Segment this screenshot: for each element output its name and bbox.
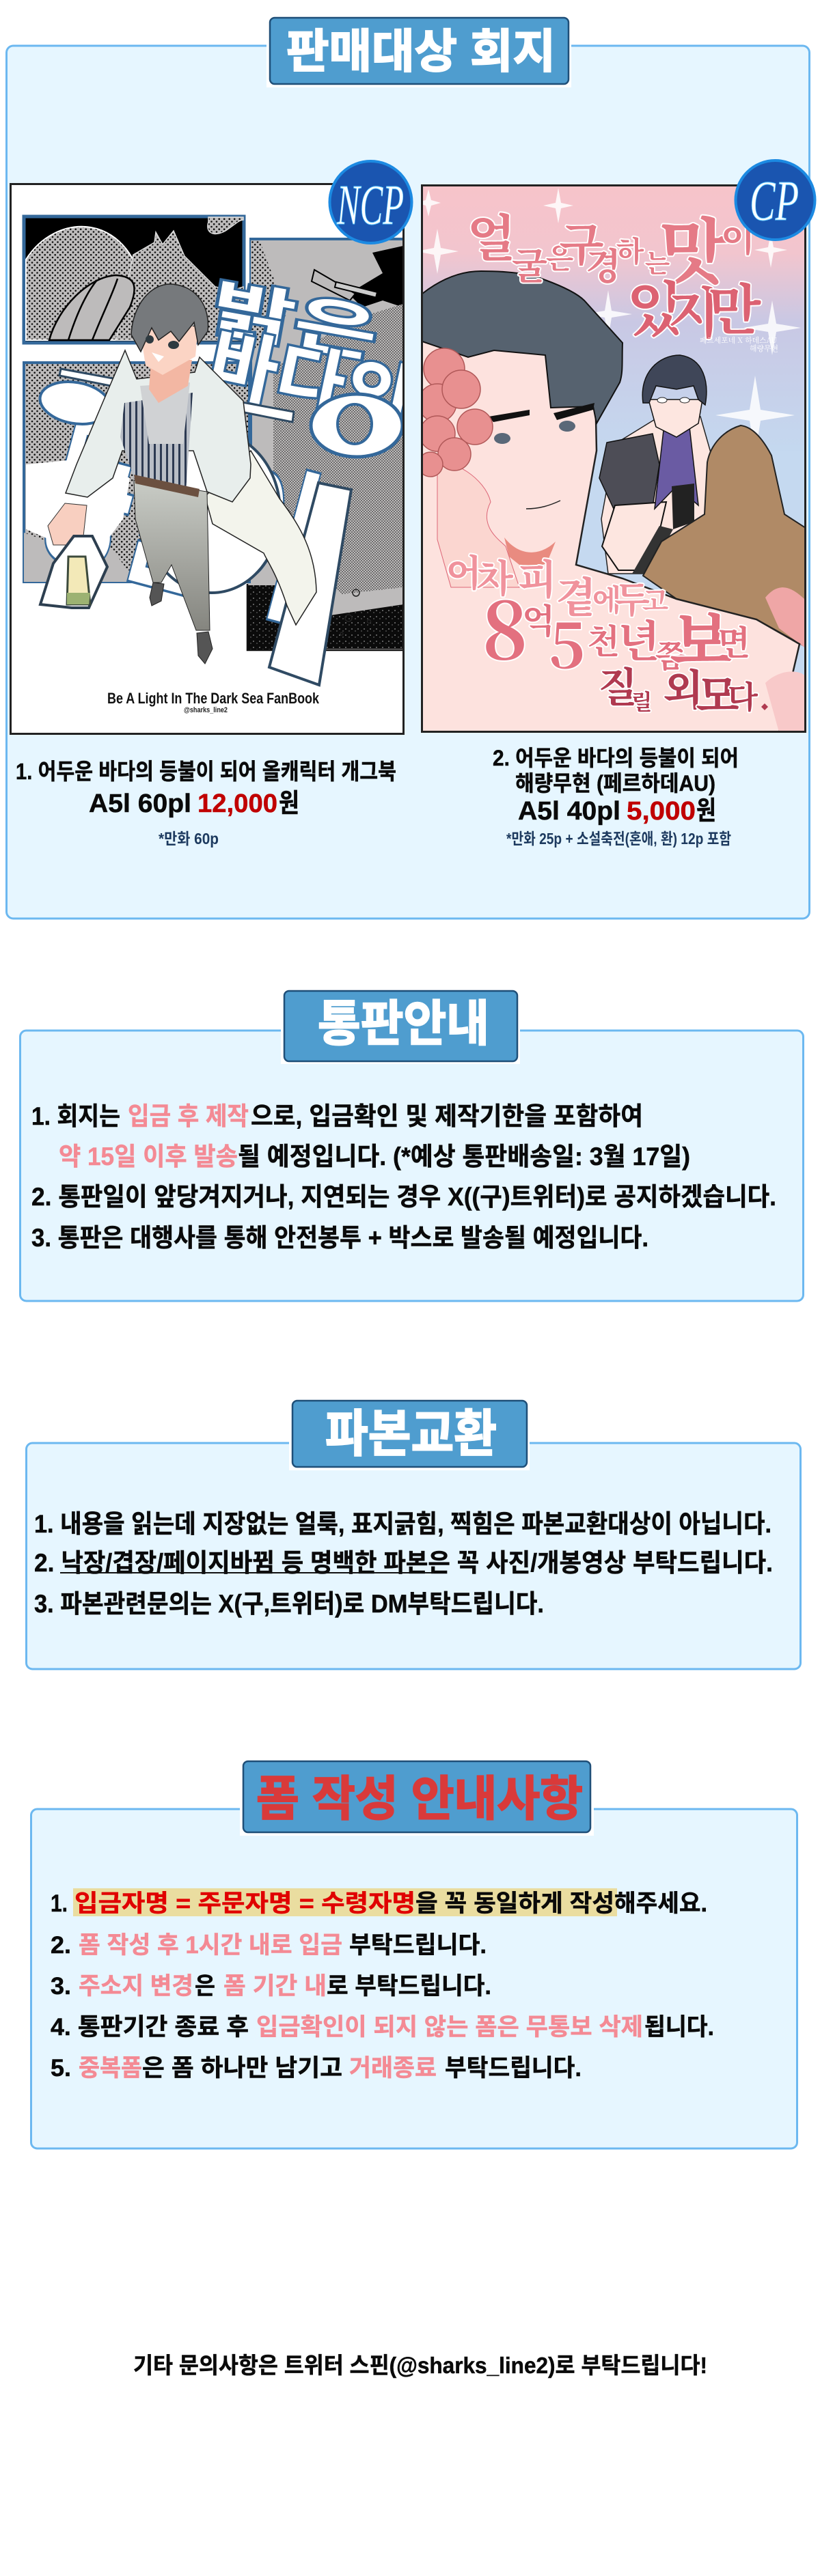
list: form notes: 입금확인이 되지 않는 폼은 무통보 삭제: [256, 2014, 643, 2041]
coat tail: [205, 451, 316, 625]
list: form notes: 폼 작성 후 1시간 내로 입금: [79, 1932, 342, 1959]
character illustration: [40, 284, 316, 664]
face: [139, 326, 198, 375]
list: form notes: 1.: [51, 1890, 68, 1917]
cover title upper: 만: [708, 266, 761, 345]
white zigzag lower left: [26, 460, 130, 541]
list: form notes: 됩니다.: [644, 2014, 714, 2041]
white ring left: [38, 380, 106, 425]
list: form notes: 입금자명 = 주문자명 = 수령자명: [74, 1890, 415, 1917]
book 1 price: 원: [279, 789, 299, 818]
list: form notes: 2.: [51, 1932, 71, 1959]
cover title upper: 맛: [659, 195, 730, 299]
cover title lower: 어: [446, 544, 482, 597]
cover title upper: 얼: [467, 199, 516, 271]
neck: [149, 360, 192, 403]
eyes: [146, 335, 179, 349]
cover title lower: 에: [592, 576, 621, 619]
cover title upper: 구: [559, 208, 604, 275]
book 2 price: 5,000: [627, 797, 696, 826]
ring hole: [338, 404, 372, 444]
cover title upper: 굴: [512, 238, 547, 290]
shoes: [150, 583, 213, 664]
big white ring centre: [167, 443, 281, 594]
main character skin: [422, 341, 800, 732]
comic panel: top right: [251, 239, 405, 526]
cover subtitle small: [700, 336, 778, 352]
cover handle: @sharks_line2: [184, 706, 228, 714]
cover title lower: 피: [517, 548, 557, 606]
list: form notes: 부탁드립니다.: [445, 2055, 582, 2082]
hand: [48, 503, 87, 545]
list: form notes: 폼 기간 내: [223, 1973, 327, 2000]
cover title lower: 억: [522, 594, 555, 643]
list: mail order notes: 될 예정입니다. (*예상 통판배송일: 3월 17일): [238, 1143, 690, 1171]
list: form notes: 주소지 변경: [79, 1973, 193, 2000]
book 1 title: 1. 어두운 바다의 등불이 되어 올캐릭터 개그북: [16, 759, 396, 784]
badge: CP: [735, 160, 815, 240]
cover title lettering: [44, 278, 402, 624]
cover title lower: 차: [476, 549, 514, 604]
hair: [131, 284, 208, 352]
heading badge: mail order info: 통판안내: [318, 983, 489, 1055]
cover title lower: 곁: [556, 564, 597, 625]
cover title lower: 천: [587, 615, 620, 664]
cover title lower: 릴: [631, 685, 652, 716]
book 2 price: 원: [696, 797, 716, 826]
panel: target books: [7, 14, 815, 919]
lantern: [40, 536, 107, 608]
white ring right: [311, 394, 402, 457]
list: form notes: 은: [195, 1973, 215, 2000]
cover title lower: 고: [642, 580, 668, 619]
belt: [134, 475, 200, 497]
list: form notes: 은 폼 하나만 남기고: [142, 2055, 342, 2082]
cover title upper: 는: [645, 242, 670, 280]
comic panel: whale: [24, 216, 244, 343]
cover caption: Be A Light In The Dark Sea FanBook: [107, 690, 320, 707]
cover title lower: 쯤: [655, 632, 685, 677]
cover title lower: 8: [482, 570, 528, 682]
list: mail order notes: 약 15일 이후 발송: [59, 1143, 238, 1171]
cover subtitle small: 페르세포네 X 하데스AU: [700, 335, 777, 346]
heading badge: form instructions: 폼 작성 안내사항: [256, 1761, 583, 1830]
white long stroke: [59, 369, 294, 422]
heading badge: mail order info: [281, 983, 520, 1064]
second character body: [599, 355, 724, 574]
cover title lettering: 밝은: [205, 258, 385, 374]
sparkles: [416, 188, 801, 455]
list: form notes: 거래종료: [349, 2055, 437, 2082]
cover title lower: 모: [696, 660, 739, 725]
cover subtitle small: 해량무현: [750, 343, 778, 354]
cover title lower: 5: [549, 597, 586, 686]
list: form notes: 로 부탁드립니다.: [327, 1973, 491, 2000]
cover title upper: 이: [721, 210, 755, 262]
cover title upper: 지: [667, 270, 720, 348]
list: form notes: 해주세요.: [614, 1890, 707, 1917]
book 1 price: [89, 789, 299, 818]
coat body: [66, 350, 251, 502]
list: form notes: 3.: [51, 1973, 71, 2000]
pink gradient background: [422, 185, 806, 458]
list: exchange notes: 1. 내용을 읽는데 지장없는 얼룩, 표지긁힘, 찍힘은 파본교환대상이 아닙니다.: [34, 1510, 771, 1538]
cover title lettering: 등불이: [18, 356, 344, 656]
book 2 title: 2. 어두운 바다의 등불이 되어: [493, 746, 739, 770]
footer contact note: 기타 문의사항은 트위터 스핀(@sharks_line2)로 부탁드립니다!: [133, 2353, 707, 2378]
book 2 price: [518, 797, 716, 826]
brown cloak: [643, 425, 810, 645]
cover title upper: 있: [626, 262, 683, 347]
panel: form instructions: [31, 1759, 797, 2148]
large slanted white stroke: [269, 483, 351, 685]
list: form notes: 을 꼭 동일하게 작성: [415, 1890, 614, 1917]
cover title lower: 다: [728, 673, 758, 718]
book 2 title: [493, 746, 739, 796]
list: mail order notes: 2. 통판일이 앞당겨지거나, 지연되는 경우 X((구)트위터)로 공지하겠습니다.: [31, 1183, 776, 1211]
panel: mail order info: [20, 983, 804, 1301]
heading badge: target books: 판매대상 회지: [286, 14, 556, 81]
list: mail order notes: 입금 후 제작: [128, 1102, 249, 1130]
cover title upper: [470, 211, 763, 340]
list: form notes: 5.: [51, 2055, 71, 2082]
cover title lower: 면: [718, 616, 750, 665]
cover title lower: [447, 553, 768, 713]
cover title lower: 년: [618, 607, 660, 670]
book 1 price: A5l 60pl: [89, 789, 191, 818]
cover title lower: 두: [614, 571, 650, 624]
comic panel: lower right: [246, 526, 402, 652]
list: mail order notes: 으로, 입금확인 및 제작기한을 포함하여: [251, 1102, 643, 1130]
list: mail order notes: [31, 1102, 776, 1252]
eyebrows and eyes: [489, 403, 594, 422]
list: form notes: 중복폼: [79, 2055, 142, 2082]
hair main: [422, 271, 623, 423]
trousers: [134, 480, 210, 630]
cover title upper: 은: [546, 236, 573, 277]
jaw and neck shade: [504, 537, 556, 565]
book 1 price: 12,000: [197, 789, 277, 818]
book 2 title: 해량무현 (페르하데AU): [515, 771, 715, 796]
cover title lower: 질: [598, 656, 638, 714]
badge: NCP: [329, 161, 411, 243]
list: form notes: [51, 1888, 714, 2082]
list: exchange notes: 3. 파본관련문의는 X(구,트위터)로 DM부탁드립니다.: [34, 1590, 544, 1618]
list: mail order notes: 3. 통판은 대행사를 통해 안전봉투 + 박스로 발송될 예정입니다.: [31, 1224, 648, 1252]
list: exchange notes: 2. 낙장/겹장/페이지바뀜 등 명백한 파본은 꼭 사진/개봉영상 부탁드립니다.: [34, 1549, 773, 1577]
panel: damaged copy exchange: [26, 1393, 801, 1669]
striped shirt: [120, 393, 193, 492]
list: exchange notes: [34, 1510, 773, 1618]
heading badge: exchange: 파본교환: [325, 1393, 497, 1466]
book 1 note: *만화 60p: [159, 830, 219, 848]
list: mail order notes: 1. 회지는: [31, 1102, 120, 1130]
book 2 note: *만화 25p + 소설축전(혼애, 환) 12p 포함: [506, 830, 731, 848]
cover title lower: 보: [670, 589, 733, 683]
cover title upper: 하: [616, 229, 644, 270]
cover: fanbook left: [11, 184, 424, 733]
list: form notes: 부탁드립니다.: [349, 1932, 487, 1959]
cover title upper: 경: [586, 238, 621, 290]
badge: NCP: NCP: [336, 173, 404, 237]
flowers: [418, 348, 493, 477]
cover: comic right: [416, 185, 810, 732]
cover title lower: 외: [663, 656, 704, 717]
book 2 price: A5l 40pl: [518, 797, 620, 826]
cover title lettering: 바다의: [200, 300, 424, 450]
comic panel: lower left: [24, 363, 249, 582]
list: form notes: 4. 통판기간 종료 후: [51, 2014, 249, 2041]
